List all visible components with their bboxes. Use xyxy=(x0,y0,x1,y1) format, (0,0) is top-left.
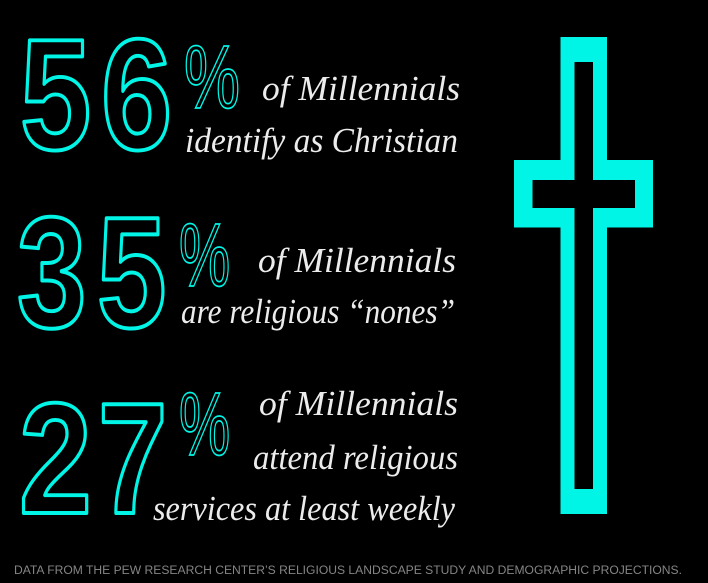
number: 56 xyxy=(20,7,172,183)
caption xyxy=(181,241,456,331)
number: 35 xyxy=(17,185,166,361)
stat: 35 percent religious nones xyxy=(17,185,456,361)
caption: are religious “nones” xyxy=(181,292,455,331)
percent sign: % xyxy=(184,28,240,128)
caption: services at least weekly xyxy=(153,489,455,528)
caption: of Millennials xyxy=(262,69,460,108)
number: 27: 2 xyxy=(19,370,92,547)
caption xyxy=(153,384,458,528)
number: 56: 6 xyxy=(101,7,172,183)
caption: of Millennials xyxy=(259,384,458,423)
percent sign: % xyxy=(179,206,230,306)
percent sign: % xyxy=(179,375,230,475)
number: 35: 5 xyxy=(97,185,166,361)
stat: 56 percent identify as Christian xyxy=(20,7,460,183)
caption: identify as Christian xyxy=(185,121,458,160)
source note: DATA FROM THE PEW RESEARCH CENTER’S RELIGIOUS LANDSCAPE STUDY AND DEMOGRAPHIC PROJECTIONS. xyxy=(14,565,682,577)
caption: attend religious xyxy=(253,438,458,477)
number: 56: 5 xyxy=(20,7,91,183)
icon: outlined cross xyxy=(514,37,653,514)
caption xyxy=(185,69,460,160)
number: 27 xyxy=(19,370,167,547)
stat: 27 percent attend services weekly xyxy=(19,370,458,547)
number: 35: 3 xyxy=(17,185,86,361)
caption: of Millennials xyxy=(258,241,456,280)
number: 27: 7 xyxy=(98,371,167,547)
